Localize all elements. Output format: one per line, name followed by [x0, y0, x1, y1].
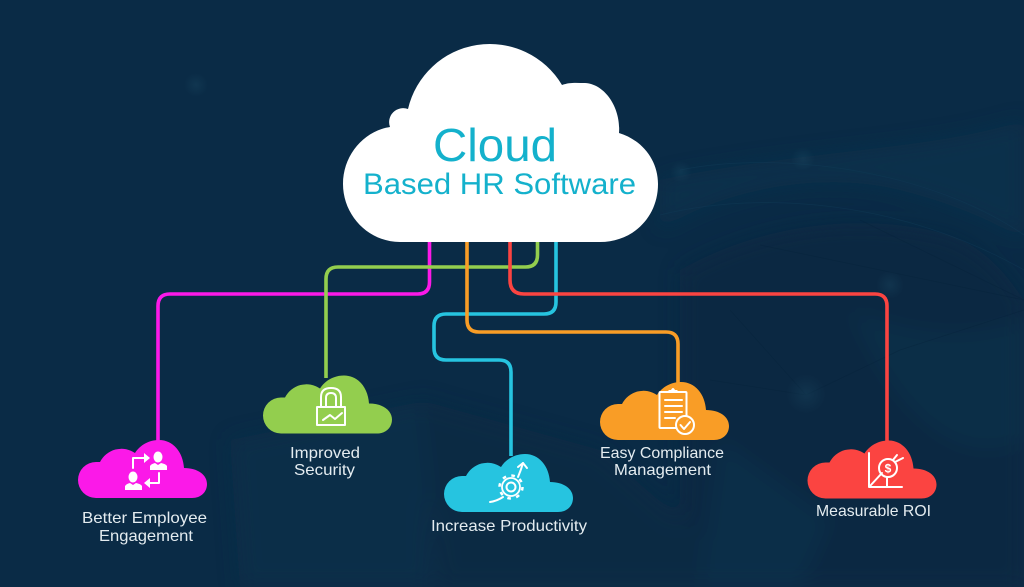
item: better employee engagement [78, 440, 207, 545]
label line 2: Security [294, 462, 355, 479]
cloud [263, 376, 392, 434]
label: Easy Compliance [600, 445, 724, 462]
icon: gear with arrow [490, 463, 527, 502]
cloud [808, 440, 936, 498]
label: Better Employee [82, 510, 207, 527]
item: measurable roi [808, 440, 936, 520]
icon: clipboard with check [660, 388, 694, 434]
cloud [444, 454, 573, 512]
cloud [600, 382, 729, 440]
icon: people exchanging [125, 452, 167, 490]
connector: measurable roi [510, 240, 887, 443]
item: easy compliance management [600, 382, 729, 479]
icon: lock with chart [317, 388, 345, 425]
item: increase productivity [431, 454, 587, 535]
label: Measurable ROI [816, 503, 931, 520]
item: improved security [263, 376, 392, 479]
cloud [78, 440, 207, 498]
label: Increase Productivity [431, 518, 587, 535]
connector: better employee engagement [158, 240, 430, 442]
title: Based HR Software: Based HR Software [363, 168, 636, 201]
connector: increase productivity [434, 240, 556, 456]
main cloud [343, 44, 658, 242]
connector: improved security [326, 240, 538, 378]
title: Cloud: Cloud [433, 119, 557, 171]
connector: easy compliance management [467, 240, 678, 384]
label: Improved [290, 445, 360, 462]
label line 2: Engagement [99, 528, 194, 545]
label line 2: Management [614, 462, 712, 479]
icon: chart with dollar coin: $ [885, 462, 892, 476]
